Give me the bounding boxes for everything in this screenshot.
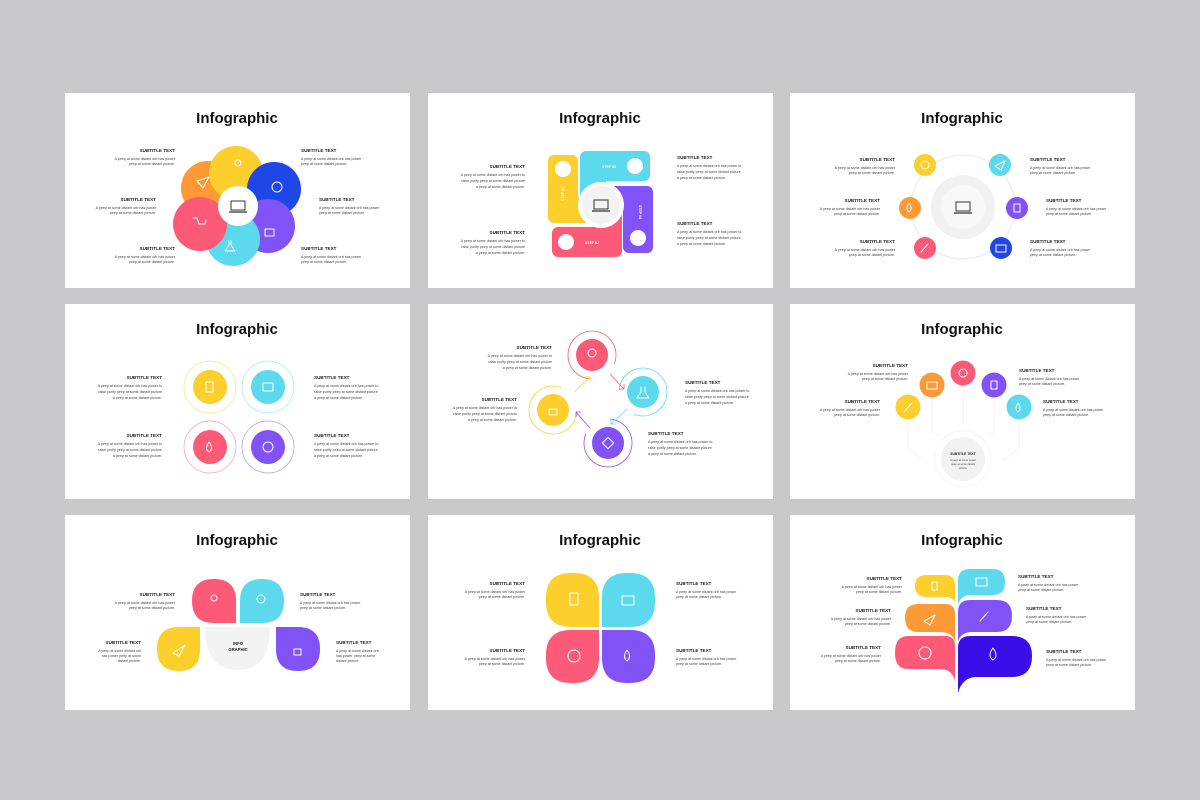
title: Infographic [196, 532, 278, 549]
slide 9: tree of speech bubbles: SUBTITLE TEXT [1026, 606, 1062, 611]
slide 1: overlapping circles: peep at some distant picture. [110, 211, 156, 215]
text blocks: a peep at some distant picture. [476, 185, 525, 189]
text blocks: A peep at some distant orb has power [465, 590, 526, 594]
slide 2: pinwheel steps: A peep at some distant orb has power to [677, 230, 741, 234]
slide 3: hub with six icons: SUBTITLE TEXT [860, 239, 895, 244]
text blocks: raise purify peep at some distant picture [488, 360, 552, 364]
slide 9: tree of speech bubbles: A peep at some distant orb has power [1026, 615, 1087, 619]
slide 6: fan of circles to hub: A peep at some distant orb has power [820, 408, 881, 412]
pinwheel diagram: STEP 01 [561, 187, 565, 201]
slide 4: four ringed circles [65, 304, 410, 499]
slide 9: tree of speech bubbles: A peep at some distant orb has power [831, 617, 892, 621]
slide 7: petals around info graphic: distant picture. [336, 659, 359, 663]
slide 7: petals around info graphic: SUBTITLE TEXT [336, 640, 372, 645]
slide 7: petals around info graphic [65, 515, 410, 710]
petals diagram: INFO [233, 641, 244, 646]
slide 5: cycle with arrows: raise purify peep at some distant picture [685, 395, 749, 399]
slide 1: overlapping circles: peep at some distant picture. [319, 211, 365, 215]
tree diagram [895, 569, 1032, 693]
text blocks: SUBTITLE TEXT [140, 148, 175, 153]
slide 8: four-leaf petals: peep at some distant picture. [676, 662, 722, 666]
text blocks: SUBTITLE TEXT [860, 157, 895, 162]
slide 4: four ringed circles: raise purify peep at some distant picture [314, 448, 378, 452]
title: Infographic [559, 110, 641, 127]
slide 1: overlapping circles: SUBTITLE TEXT [121, 197, 156, 202]
fan diagram: picture. [959, 466, 968, 470]
slide 4: four ringed circles: SUBTITLE TEXT [314, 433, 350, 438]
slide 1: overlapping circles: A peep at some distant orb has power [96, 206, 157, 210]
slide 9: tree of speech bubbles: SUBTITLE TEXT [846, 645, 881, 650]
slide 3: hub with six icons: peep at some distant picture. [834, 212, 880, 216]
text blocks: peep at some distant picture. [856, 590, 902, 594]
slide 6: fan of circles to hub: A peep at some distant orb has power [1019, 377, 1080, 381]
title: Infographic [921, 321, 1003, 338]
slide 6: fan of circles to hub [790, 304, 1135, 499]
slide 3: hub with six icons: SUBTITLE TEXT [845, 198, 880, 203]
petals diagram [157, 579, 320, 671]
slide 5: cycle with arrows: SUBTITLE TEXT [482, 397, 517, 402]
slide 7: petals around info graphic: SUBTITLE TEXT [300, 592, 336, 597]
text blocks: peep at some distant picture. [479, 595, 525, 599]
petals diagram [546, 573, 655, 683]
title: Infographic [921, 532, 1003, 549]
text blocks: A peep at some distant orb has power [848, 372, 909, 376]
text blocks: peep at some distant picture. [129, 162, 175, 166]
petals diagram: GRAPHIC [228, 647, 248, 652]
slide 3: hub with six icons: A peep at some distant orb has power [820, 207, 881, 211]
text blocks [461, 164, 525, 189]
text blocks: peep at some distant picture. [129, 606, 175, 610]
slide 3: hub with six icons: peep at some distant picture. [1046, 212, 1092, 216]
slide 7: petals around info graphic: peep at some distant picture. [300, 606, 346, 610]
slide 9: tree of speech bubbles: peep at some distant picture. [1026, 620, 1072, 624]
text blocks: A peep at some distant orb has power [835, 166, 896, 170]
slide 3: hub with six icons: SUBTITLE TEXT [1046, 198, 1082, 203]
slide 3: hub with six icons: A peep at some distant orb has power [835, 248, 896, 252]
slide 2: pinwheel steps: SUBTITLE TEXT [677, 221, 713, 226]
slide 2: pinwheel steps: a peep at some distant picture. [677, 176, 726, 180]
slide 9: tree of speech bubbles: A peep at some distant orb has power [821, 654, 882, 658]
slide 1: overlapping circles: peep at some distant picture. [129, 260, 175, 264]
text blocks: raise purify peep at some distant picture [98, 390, 162, 394]
slide 7: petals around info graphic: A peep at some distant orb [336, 649, 379, 653]
fan diagram: SUBTITLE TEXT [950, 452, 976, 456]
slide 6: fan of circles to hub: peep at some distant picture. [1043, 413, 1089, 417]
text blocks [842, 576, 903, 594]
slide 2: pinwheel steps: raise purify peep at some distant picture [677, 170, 741, 174]
text blocks: SUBTITLE TEXT [140, 592, 175, 597]
pinwheel diagram: STEP 02 [585, 241, 599, 245]
slide 5: cycle with arrows: A peep at some distant orb has power to [648, 440, 712, 444]
slide 5: cycle with arrows: a peep at some distant picture. [468, 418, 517, 422]
circles grid [184, 361, 294, 473]
slide 9: tree of speech bubbles: SUBTITLE TEXT [1018, 574, 1054, 579]
slide 6: fan of circles to hub: SUBTITLE TEXT [1019, 368, 1055, 373]
text blocks: A peep at some distant orb has power to [461, 173, 525, 177]
slide 2: pinwheel steps: a peep at some distant picture. [476, 251, 525, 255]
slide 1: overlapping circles [65, 93, 410, 288]
slide 2: pinwheel steps: A peep at some distant orb has power to [677, 164, 741, 168]
slide 9: tree of speech bubbles: peep at some distant picture. [1018, 588, 1064, 592]
text blocks: SUBTITLE TEXT [127, 375, 162, 380]
slide 4: four ringed circles: A peep at some distant orb has power to [314, 442, 378, 446]
slide 7: petals around info graphic: A peep at some distant orb [98, 649, 141, 653]
text blocks: peep at some distant picture. [849, 171, 895, 175]
slide 1: overlapping circles: A peep at some distant orb has power [301, 255, 362, 259]
slide 3: hub with six icons: peep at some distant picture. [1030, 253, 1076, 257]
slide 5: cycle with arrows: raise purify peep at some distant picture [648, 446, 712, 450]
slide 5: cycle with arrows: raise purify peep at some distant picture [453, 412, 517, 416]
text blocks [98, 375, 162, 400]
slide 6: fan of circles to hub: SUBTITLE TEXT [845, 399, 880, 404]
text blocks: A peep at some distant orb has power [842, 585, 903, 589]
slide 3: hub with six icons: peep at some distant picture. [1030, 171, 1076, 175]
text blocks: A peep at some distant orb has power [115, 157, 176, 161]
fan diagram: peep at some distant [951, 462, 975, 466]
slide 2: pinwheel steps [428, 93, 773, 288]
slide 8: four-leaf petals: A peep at some distant orb has power [676, 590, 737, 594]
text blocks: peep at some distant picture. [862, 377, 908, 381]
slide 8: four-leaf petals: A peep at some distant orb has power [676, 657, 737, 661]
slide 9: tree of speech bubbles: A peep at some distant orb has power [1018, 583, 1079, 587]
slide 7: petals around info graphic: distant picture. [118, 659, 141, 663]
slide 9: tree of speech bubbles: peep at some distant picture. [1046, 663, 1092, 667]
slide 3: hub with six icons: A peep at some distant orb has power [1030, 166, 1091, 170]
slide 6: fan of circles to hub: SUBTITLE TEXT [1043, 399, 1079, 404]
slide 2: pinwheel steps: raise purify peep at some distant picture [677, 236, 741, 240]
slide 6: fan of circles to hub: A peep at some distant orb has power [1043, 408, 1104, 412]
slide 4: four ringed circles: raise purify peep at some distant picture [98, 448, 162, 452]
slide 8: four-leaf petals: A peep at some distant orb has power [465, 657, 526, 661]
slide 8: four-leaf petals: peep at some distant picture. [676, 595, 722, 599]
slide 1: overlapping circles: A peep at some distant orb has power [115, 255, 176, 259]
title: Infographic [196, 110, 278, 127]
slide 3: hub with six icons: A peep at some distant orb has power [1046, 207, 1107, 211]
text blocks [115, 148, 176, 166]
text blocks: SUBTITLE TEXT [873, 363, 908, 368]
slide 9: tree of speech bubbles: peep at some distant picture. [835, 659, 881, 663]
text blocks: A peep at some distant orb has power [115, 601, 176, 605]
slide 7: petals around info graphic: has power peep at some [336, 654, 375, 658]
slide 9: tree of speech bubbles: SUBTITLE TEXT [1046, 649, 1082, 654]
slide 5: cycle with arrows: a peep at some distant picture. [685, 401, 734, 405]
text blocks: raise purify peep at some distant picture [461, 179, 525, 183]
fan diagram: A peep at some power [950, 458, 976, 462]
text blocks: SUBTITLE TEXT [490, 164, 525, 169]
slide 1: overlapping circles: peep at some distant picture. [301, 162, 347, 166]
slide 4: four ringed circles: A peep at some distant orb has power to [314, 384, 378, 388]
pinwheel diagram: STEP 04 [638, 205, 642, 219]
slide 2: pinwheel steps: raise purify peep at some distant picture [461, 245, 525, 249]
slide 2: pinwheel steps: SUBTITLE TEXT [677, 155, 713, 160]
slide 3: hub with six icons: peep at some distant picture. [849, 253, 895, 257]
slide 4: four ringed circles: raise purify peep at some distant picture [314, 390, 378, 394]
slide 3: hub with six icons: A peep at some distant orb has power [1030, 248, 1091, 252]
slide 4: four ringed circles: SUBTITLE TEXT [314, 375, 350, 380]
slide 4: four ringed circles: A peep at some distant orb has power to [98, 442, 162, 446]
slide 1: overlapping circles: A peep at some distant orb has power [319, 206, 380, 210]
text blocks: SUBTITLE TEXT [867, 576, 902, 581]
slide 8: four-leaf petals: SUBTITLE TEXT [490, 648, 525, 653]
slide 4: four ringed circles: a peep at some distant picture. [314, 454, 363, 458]
slide 1: overlapping circles: SUBTITLE TEXT [301, 246, 337, 251]
text blocks: a peep at some distant picture. [503, 366, 552, 370]
slide 9: tree of speech bubbles [790, 515, 1135, 710]
title: Infographic [196, 321, 278, 338]
text blocks [465, 581, 526, 599]
slide 2: pinwheel steps: SUBTITLE TEXT [490, 230, 525, 235]
slide 7: petals around info graphic: A peep at some distant orb has power [300, 601, 361, 605]
slide 6: fan of circles to hub: peep at some distant picture. [834, 413, 880, 417]
slide 2: pinwheel steps: a peep at some distant picture. [677, 242, 726, 246]
circles diagram [173, 146, 301, 266]
slide 7: petals around info graphic: SUBTITLE TEXT [106, 640, 141, 645]
hub diagram [899, 154, 1028, 259]
slide 4: four ringed circles: a peep at some distant picture. [113, 454, 162, 458]
pinwheel diagram: STEP 03 [602, 165, 616, 169]
text blocks [835, 157, 896, 175]
pinwheel diagram [548, 151, 653, 257]
slide 9: tree of speech bubbles: SUBTITLE TEXT [856, 608, 891, 613]
slide 5: cycle with arrows: A peep at some distant orb has power to [453, 406, 517, 410]
slide 6: fan of circles to hub: peep at some distant picture. [1019, 382, 1065, 386]
title: Infographic [921, 110, 1003, 127]
text blocks [848, 363, 909, 381]
slide 3: hub with six icons: SUBTITLE TEXT [1030, 157, 1066, 162]
slide 8: four-leaf petals [428, 515, 773, 710]
text blocks: A peep at some distant orb has power to [98, 384, 162, 388]
text blocks: SUBTITLE TEXT [490, 581, 525, 586]
text blocks [488, 345, 552, 370]
slide 4: four ringed circles: a peep at some distant picture. [314, 396, 363, 400]
slide 1: overlapping circles: SUBTITLE TEXT [319, 197, 355, 202]
slide 4: four ringed circles: SUBTITLE TEXT [127, 433, 162, 438]
slide 1: overlapping circles: SUBTITLE TEXT [301, 148, 337, 153]
text blocks: SUBTITLE TEXT [517, 345, 552, 350]
slide 5: cycle with arrows: SUBTITLE TEXT [648, 431, 684, 436]
slide 8: four-leaf petals: SUBTITLE TEXT [676, 581, 712, 586]
text blocks: A peep at some distant orb has power to [488, 354, 552, 358]
slide 3: hub with six icons: SUBTITLE TEXT [1030, 239, 1066, 244]
slide 1: overlapping circles: SUBTITLE TEXT [140, 246, 175, 251]
slide 7: petals around info graphic: has power peep at some [102, 654, 141, 658]
slide 8: four-leaf petals: peep at some distant picture. [479, 662, 525, 666]
slide 3: hub with six icons [790, 93, 1135, 288]
fan diagram [896, 360, 1032, 487]
slide 9: tree of speech bubbles: A peep at some distant orb has power [1046, 658, 1107, 662]
slide 5: cycle with arrows: SUBTITLE TEXT [685, 380, 721, 385]
slide 5: cycle with arrows: A peep at some distant orb has power to [685, 389, 749, 393]
cycle diagram [527, 329, 669, 469]
slide 5: cycle with arrows [428, 304, 773, 499]
slide 1: overlapping circles: peep at some distant picture. [301, 260, 347, 264]
slide 8: four-leaf petals: SUBTITLE TEXT [676, 648, 712, 653]
slide 1: overlapping circles: A peep at some distant orb has power [301, 157, 362, 161]
text blocks: a peep at some distant picture. [113, 396, 162, 400]
slide 2: pinwheel steps: A peep at some distant orb has power to [461, 239, 525, 243]
title: Infographic [559, 532, 641, 549]
slide 9: tree of speech bubbles: peep at some distant picture. [845, 622, 891, 626]
text blocks [115, 592, 176, 610]
slide 5: cycle with arrows: a peep at some distant picture. [648, 452, 697, 456]
